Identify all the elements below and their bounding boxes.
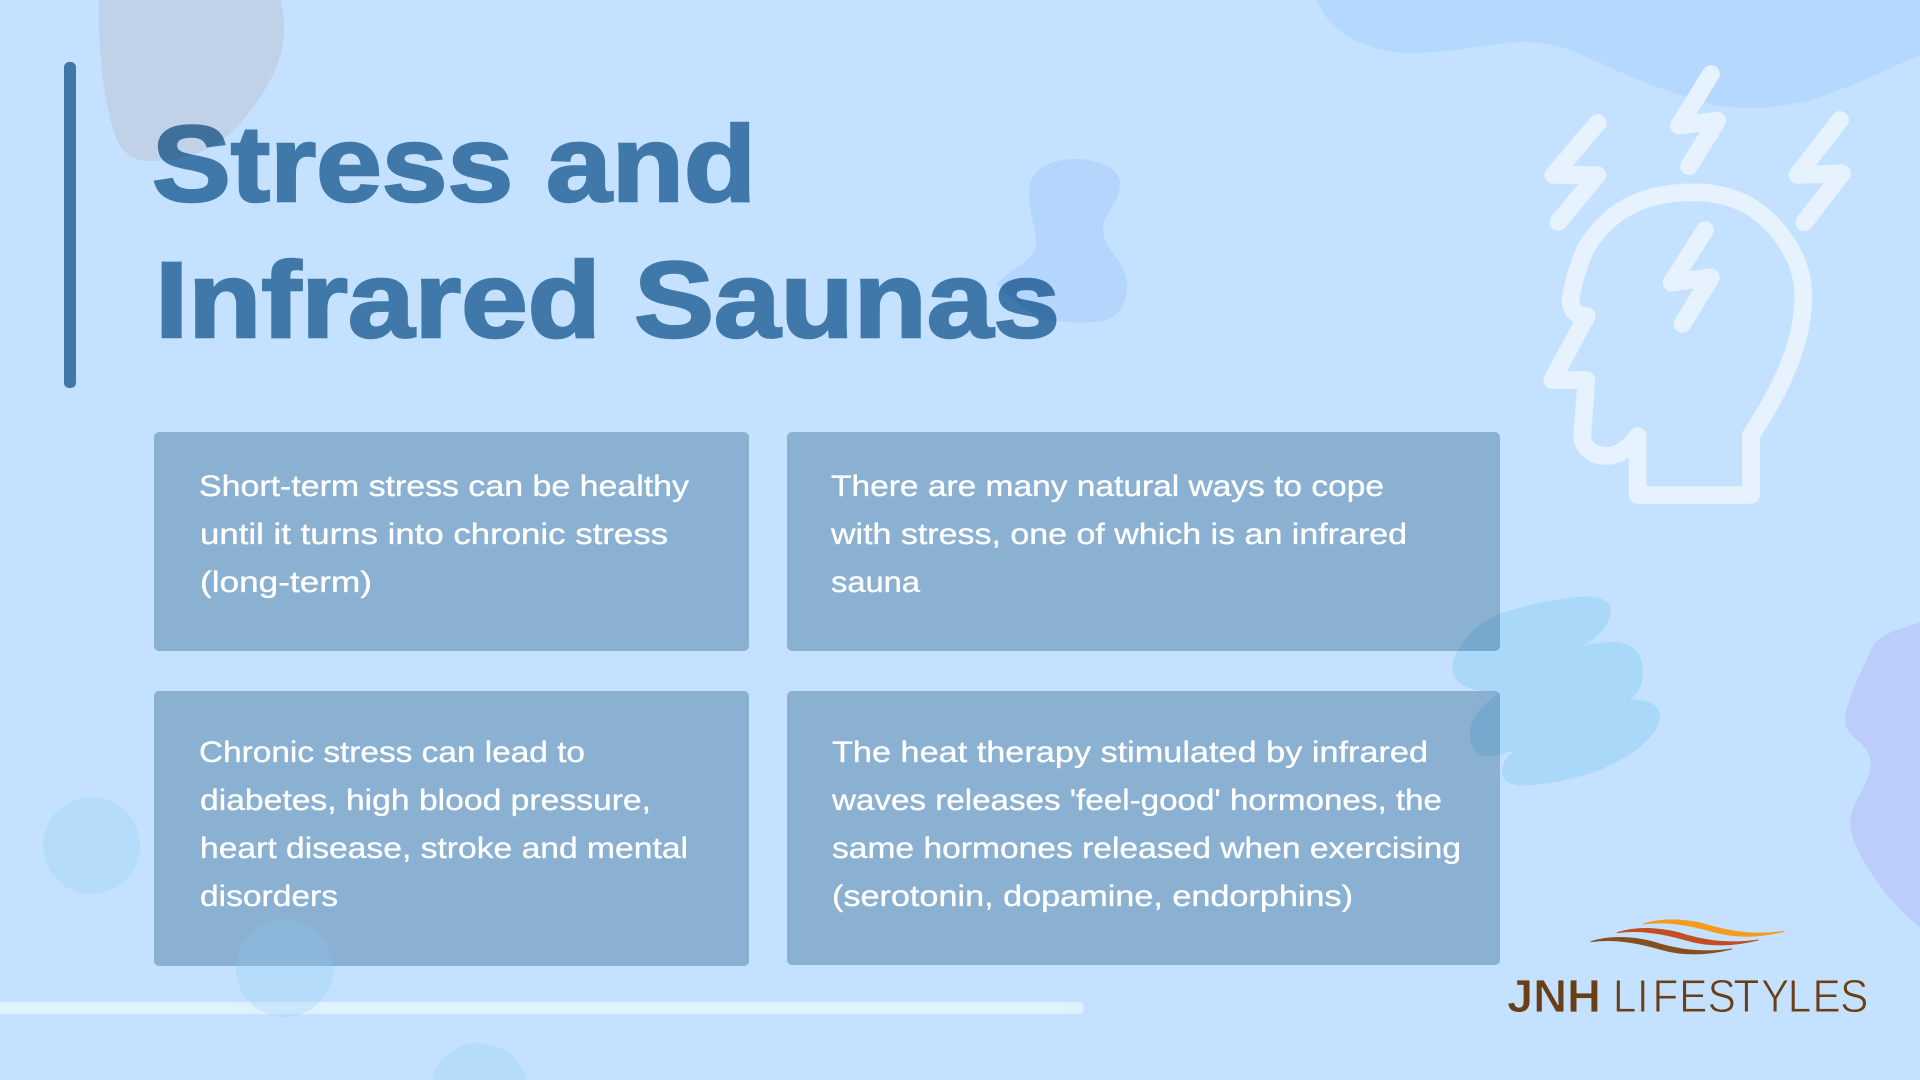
panel: heat therapy hormones: same hormones released when exercising (832, 832, 1461, 865)
title: Infrared Saunas (155, 239, 1060, 360)
blob: center right (1452, 597, 1660, 786)
blob: behind title (997, 159, 1127, 322)
panel: short-term stress (154, 432, 749, 651)
panel: chronic stress effects: disorders (200, 880, 338, 913)
accent bar (64, 62, 76, 388)
footer line (0, 1002, 1084, 1014)
panel: chronic stress effects (154, 691, 749, 966)
blob: top left (99, 0, 284, 161)
panel: natural ways to cope: There are many natural ways to cope (831, 470, 1384, 503)
title: Stress and (152, 103, 756, 224)
panel: chronic stress effects: heart disease, stroke and mental (200, 832, 688, 865)
logo: JNH Lifestyles (1507, 920, 1868, 1022)
icon: head with stress lightning bolts (1552, 74, 1842, 495)
blob: top right (1317, 0, 1920, 108)
panel: short-term stress: Short-term stress can be healthy (199, 470, 689, 503)
logo: JNH Lifestyles: JNH (1507, 970, 1601, 1022)
panel: natural ways to cope: with stress, one of which is an infrared (830, 518, 1407, 551)
panel: heat therapy hormones (787, 691, 1500, 965)
panel: chronic stress effects: diabetes, high blood pressure, (200, 784, 651, 817)
panel: chronic stress effects: Chronic stress can lead to (199, 736, 585, 769)
panel: heat therapy hormones: The heat therapy stimulated by infrared (832, 736, 1428, 769)
panel: heat therapy hormones: (serotonin, dopamine, endorphins) (832, 880, 1353, 913)
decorative circles (43, 797, 526, 1080)
panel: heat therapy hormones: waves releases 'feel-good' hormones, the (831, 784, 1442, 817)
panel: natural ways to cope (787, 432, 1500, 651)
logo: JNH Lifestyles: LIFESTYLES (1613, 971, 1868, 1022)
panel: natural ways to cope: sauna (831, 566, 920, 599)
blob: far right (1845, 623, 1920, 927)
title (152, 103, 1060, 360)
panel: short-term stress: until it turns into chronic stress (200, 518, 668, 551)
panel: short-term stress: (long-term) (200, 566, 372, 599)
